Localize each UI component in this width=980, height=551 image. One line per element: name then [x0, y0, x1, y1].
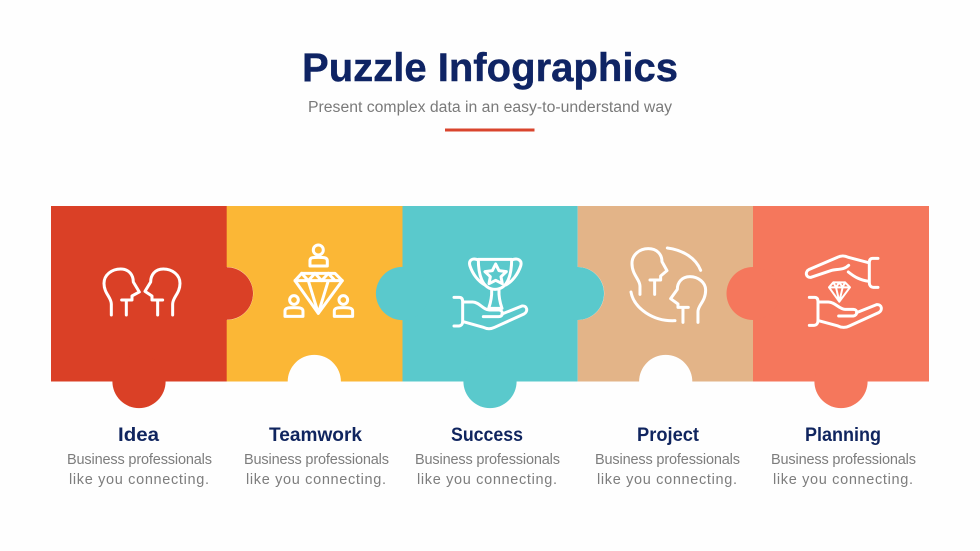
label: Planning [771, 425, 916, 488]
label: Idea: Idea [118, 425, 159, 446]
label: Teamwork: Business professionals [244, 452, 389, 468]
puzzle piece: Teamwork [227, 206, 403, 410]
icon: diamond with team [285, 245, 353, 316]
label: Project: Business professionals [595, 452, 740, 468]
label: Success: Success [451, 425, 523, 446]
icon: heads in a cycle [631, 248, 706, 322]
title: Puzzle Infographics [302, 46, 678, 90]
label: Teamwork [244, 425, 389, 488]
label: Planning: Business professionals [771, 452, 916, 468]
puzzle piece: Project [578, 206, 753, 410]
puzzle piece: Success [376, 206, 604, 408]
label: Teamwork: like you connecting. [246, 472, 386, 488]
label: Success: like you connecting. [417, 472, 557, 488]
label: Project [595, 425, 740, 488]
label: Success: Business professionals [415, 452, 560, 468]
puzzle piece: Planning [726, 206, 929, 408]
puzzle piece: Idea [51, 206, 253, 408]
label: Success [415, 425, 560, 488]
title underline [445, 128, 534, 132]
label: Idea [67, 425, 212, 488]
label: Teamwork: Teamwork [269, 425, 362, 446]
label: Planning: Planning [805, 425, 881, 446]
icon: two heads facing [104, 269, 180, 315]
label: Project: Project [637, 425, 700, 446]
icon: trophy on hand [454, 259, 527, 329]
label: Idea: Business professionals [67, 452, 212, 468]
label: Planning: like you connecting. [773, 472, 913, 488]
icon: hands protecting diamond [806, 256, 881, 327]
subtitle: Present complex data in an easy-to-understand way [308, 99, 672, 116]
label: Idea: like you connecting. [69, 472, 209, 488]
label: Project: like you connecting. [597, 472, 737, 488]
